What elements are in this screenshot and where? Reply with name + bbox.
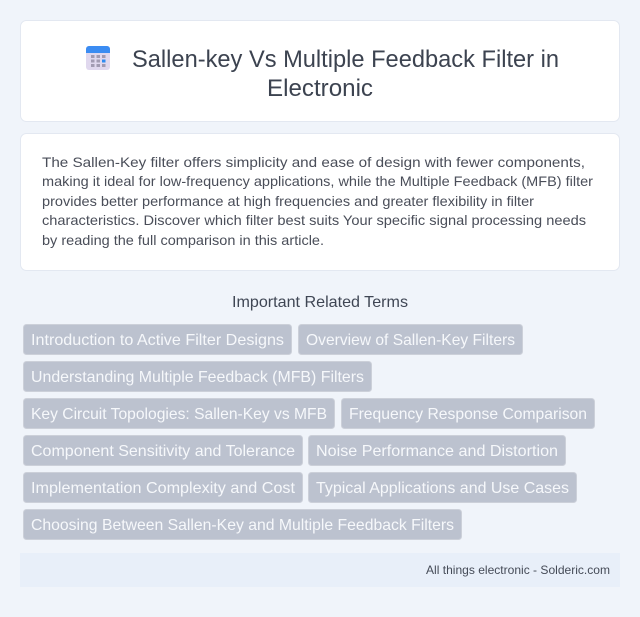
tag: Frequency Response Comparison [349,406,587,423]
footer [20,553,620,587]
tag [308,436,566,466]
tag [298,324,522,354]
tag [24,472,302,502]
title: Sallen-key Vs Multiple Feedback Filter in [132,46,559,73]
tag [24,436,302,466]
tag: Choosing Between Sallen-Key and Multiple Feedback Filters [31,517,454,534]
tag [24,362,372,392]
tag: Introduction to Active Filter Designs [31,332,284,349]
title: Electronic [267,75,373,102]
tag [24,324,292,354]
tag: Typical Applications and Use Cases [316,480,569,497]
tag: Understanding Multiple Feedback (MFB) Filters [31,369,364,386]
title [132,46,559,102]
icon: calendar grid [86,46,110,70]
footer: All things electronic - Solderic.com [426,563,610,577]
intro text card [20,134,620,270]
tag: Implementation Complexity and Cost [31,480,296,497]
tag [308,472,576,502]
tag [24,398,334,428]
heading: important related terms: Important Related Terms [232,294,408,311]
intro text card: The Sallen-Key filter offers simplicity and ease of design with fewer components, [42,154,585,170]
header card [20,20,620,122]
intro text card: characteristics. Discover which filter best suits Your specific signal processing needs [42,212,586,228]
tag: Key Circuit Topologies: Sallen-Key vs MFB [31,406,327,423]
intro text card: provides better performance at high frequencies and greater flexibility in filter [42,193,534,209]
tag: Noise Performance and Distortion [316,443,558,460]
intro text card: by reading the full comparison in this article. [42,232,324,248]
intro text card: making it ideal for low-frequency applications, while the Multiple Feedback (MFB) filter [42,173,593,189]
tag [24,510,462,540]
related terms tags [24,324,594,540]
tag: Overview of Sallen-Key Filters [306,332,515,349]
tag: Component Sensitivity and Tolerance [31,443,295,460]
tag [342,398,594,428]
